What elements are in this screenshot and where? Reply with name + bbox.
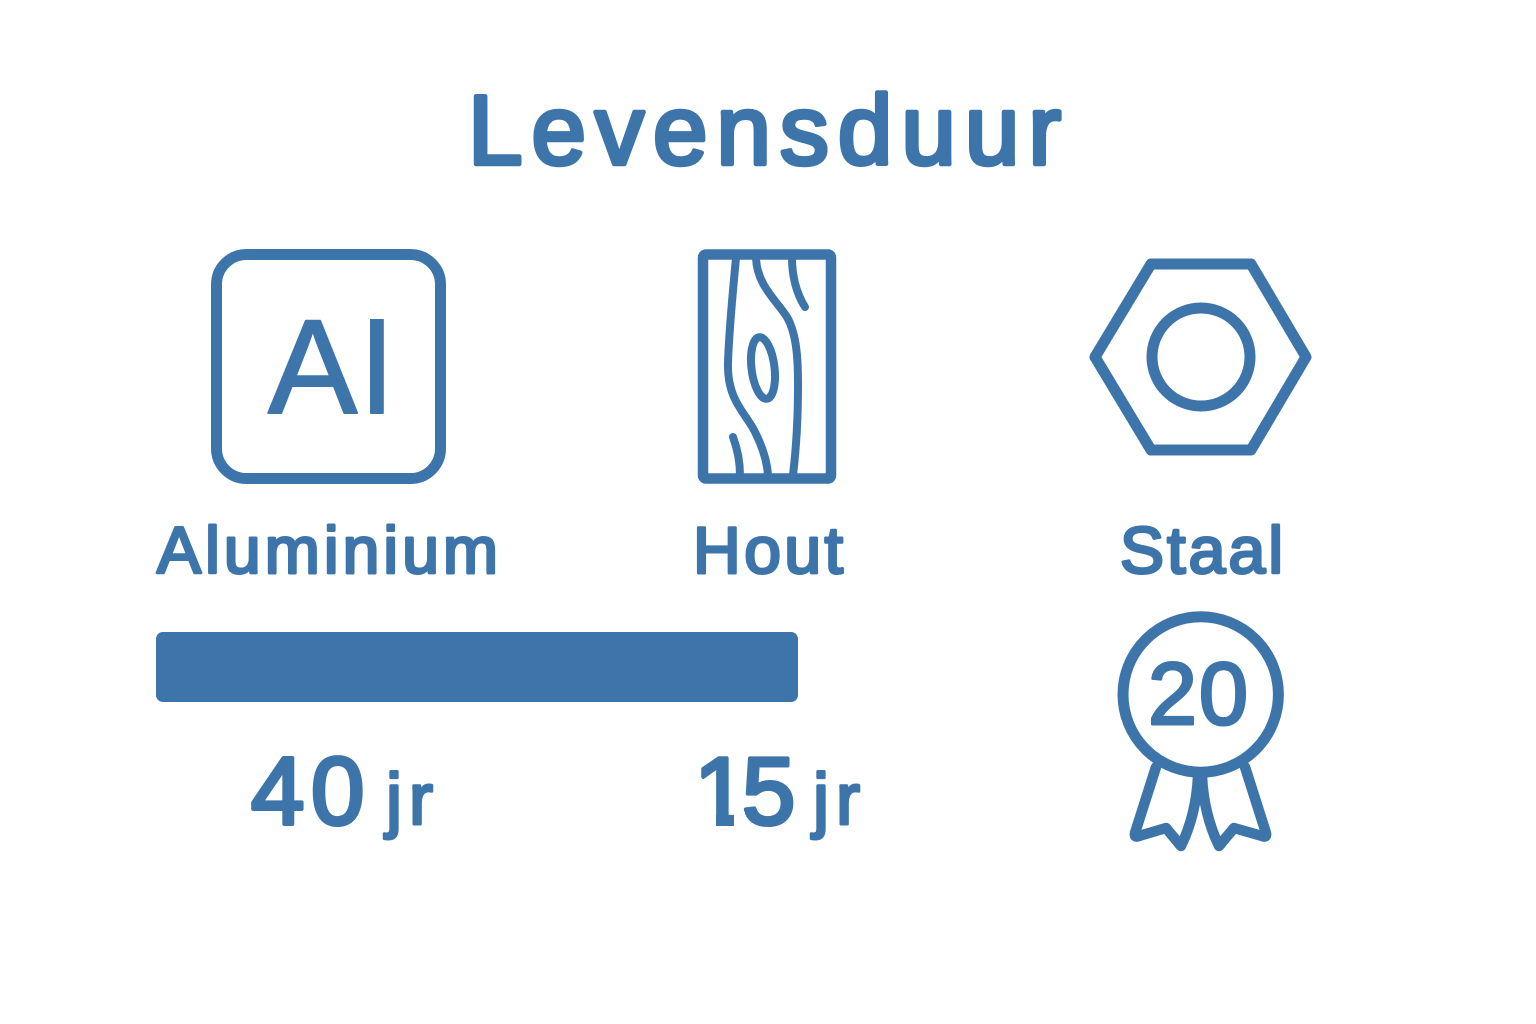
value: 40 jr: 40 — [251, 738, 364, 845]
icon: wood plank — [703, 254, 831, 478]
icon: aluminium — [216, 254, 440, 478]
label: aluminium: Aluminium — [157, 513, 498, 587]
bar: aluminium lifespan — [156, 632, 798, 702]
icon: rosette 20 jaar: 20 — [1148, 644, 1248, 743]
icon: aluminium: Al — [268, 293, 392, 442]
label: hout: Hout — [693, 513, 843, 587]
value: 15 jr — [690, 738, 860, 845]
icon: rosette 20 jaar — [1123, 617, 1278, 846]
value: 15 jr: jr — [811, 760, 860, 840]
title: Levensduur — [468, 75, 1061, 185]
icon: steel hex nut — [1095, 264, 1306, 450]
value: 40 jr: jr — [384, 760, 433, 840]
value: 40 jr — [251, 738, 433, 845]
value: 15 jr: 15 — [694, 738, 795, 845]
label: staal: Staal — [1120, 513, 1283, 587]
